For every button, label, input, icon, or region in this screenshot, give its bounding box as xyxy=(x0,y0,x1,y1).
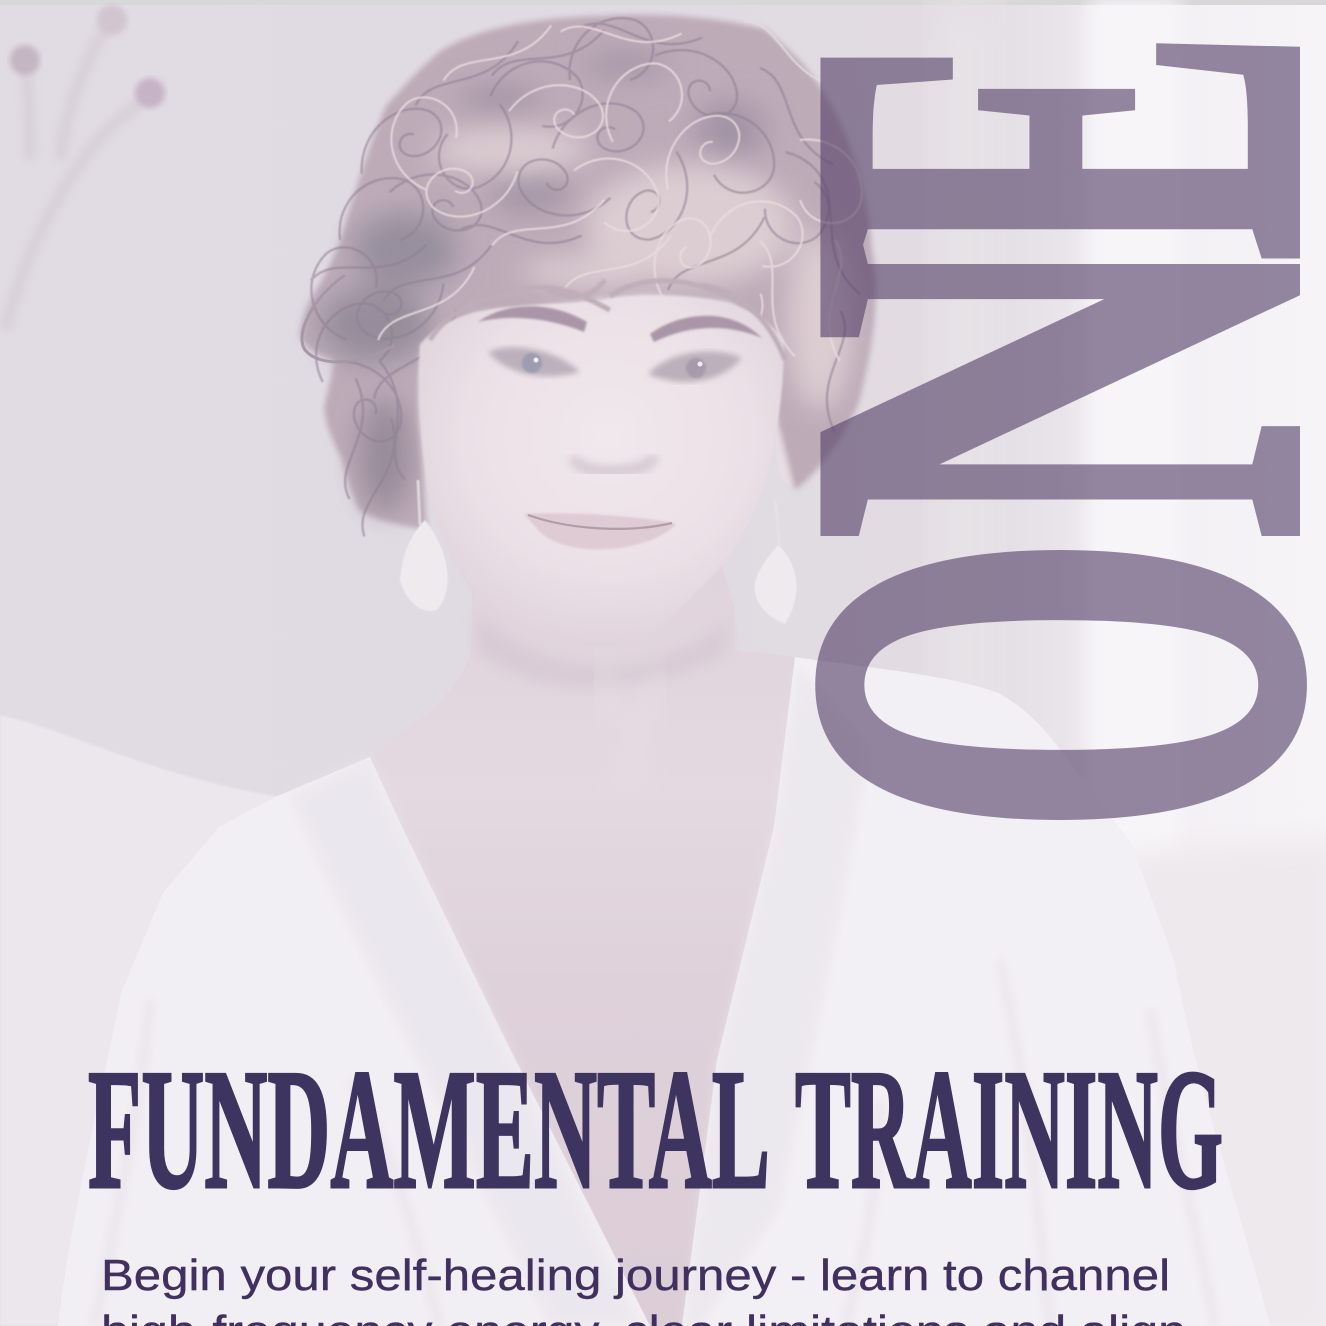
blouse: lace collar xyxy=(290,757,640,1326)
hair: flyaway curl xyxy=(302,275,395,362)
face xyxy=(419,295,783,647)
hair: back mass xyxy=(300,15,876,530)
hair: dark areas xyxy=(320,52,765,513)
blouse: folds xyxy=(95,960,1215,1326)
mouth xyxy=(524,513,676,549)
body text xyxy=(101,1251,1186,1326)
hair: light area xyxy=(430,128,852,410)
vertical word: ONE xyxy=(659,29,1326,835)
neck shadow xyxy=(476,610,730,688)
nose xyxy=(572,456,655,472)
neck and chest xyxy=(370,560,795,1326)
eyebrows xyxy=(478,306,762,342)
collarbone highlights xyxy=(600,660,660,780)
blouse xyxy=(58,657,1270,1326)
body text: Begin your self-healing journey - learn to channel xyxy=(101,1251,1170,1300)
background: dried flower branch xyxy=(5,5,165,330)
background: sofa xyxy=(0,715,1326,1326)
hair: light strands xyxy=(371,10,862,412)
hairline strands over forehead xyxy=(430,280,785,360)
earrings xyxy=(400,480,797,624)
eyes xyxy=(488,347,742,382)
hair: dark strands xyxy=(292,13,860,536)
ears xyxy=(388,402,804,498)
